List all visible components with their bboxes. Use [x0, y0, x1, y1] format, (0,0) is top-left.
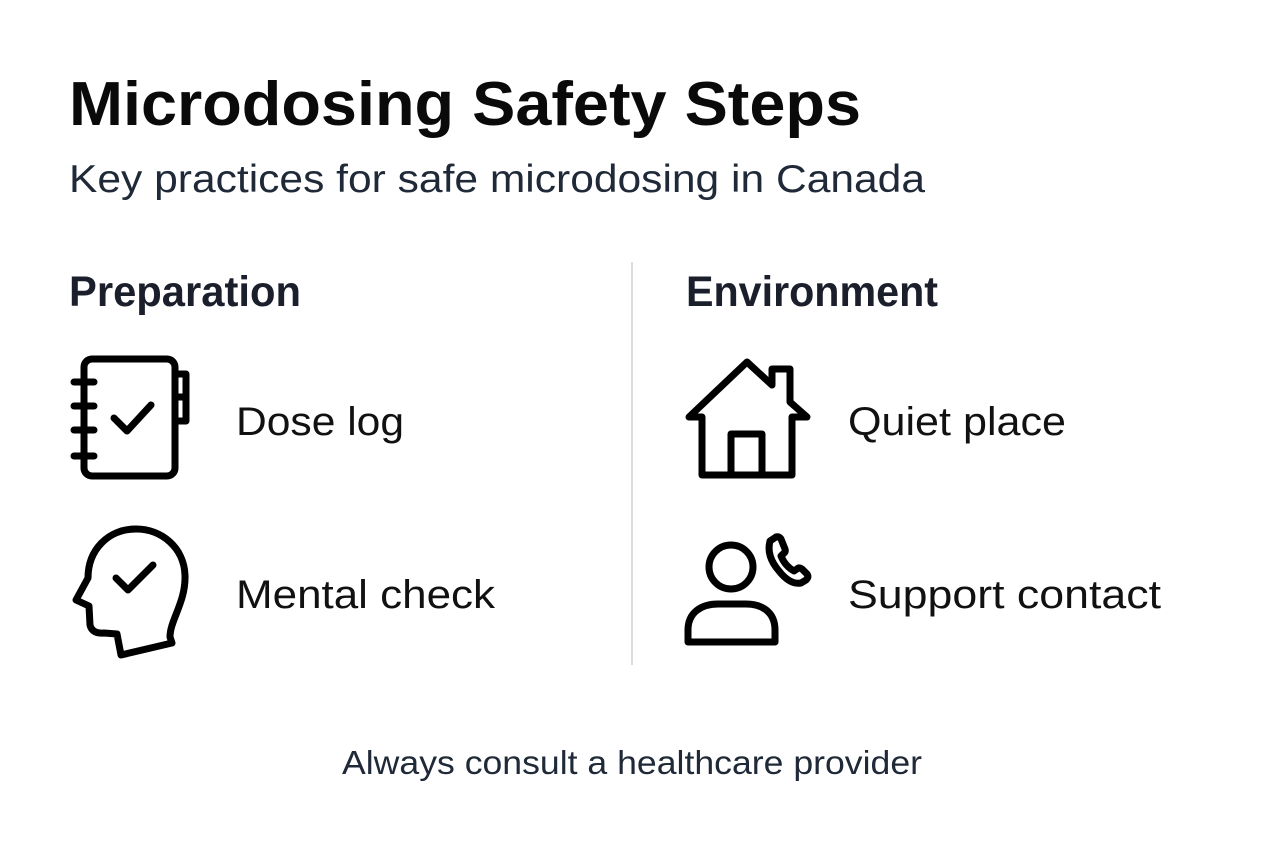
- icon: person with phone: [688, 537, 808, 642]
- label: Mental check: Mental check: [236, 573, 496, 617]
- icon: house: [689, 362, 807, 475]
- label: Support contact: Support contact: [848, 573, 1161, 617]
- title: Microdosing Safety Steps: [69, 70, 861, 139]
- label: Dose log: Dose log: [236, 400, 404, 444]
- subtitle: Key practices for safe microdosing in Canada: [69, 158, 925, 201]
- heading: Preparation: Preparation: [69, 268, 301, 316]
- footer note: Always consult a healthcare provider: [342, 744, 922, 781]
- icon: head with check: [76, 529, 185, 655]
- heading: Environment: Environment: [686, 268, 938, 316]
- label: Quiet place: Quiet place: [848, 400, 1066, 444]
- icon: notebook: [74, 359, 186, 476]
